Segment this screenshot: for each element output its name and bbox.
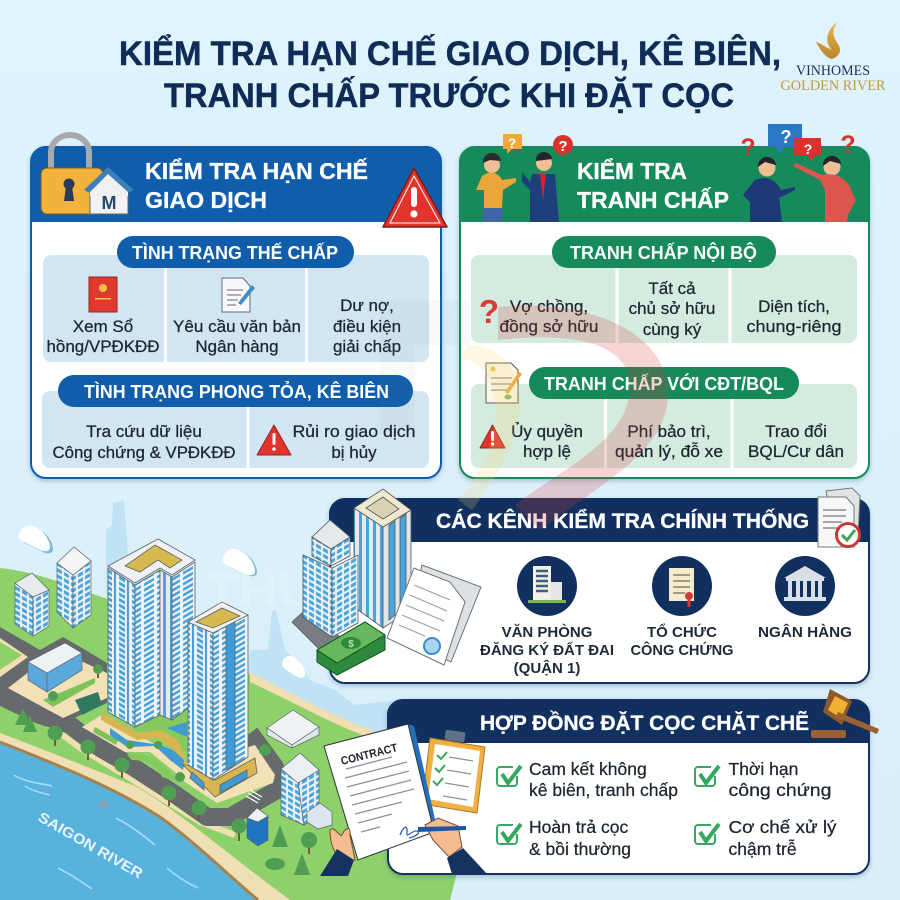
item: Ủy quyền: hợp lệ [523,442,571,461]
item: Yêu cầu văn bản: Ngân hàng [195,337,279,356]
channel: Tổ chức công chứng: TỔ CHỨC [647,623,717,641]
section pill: TÌNH TRẠNG THẾ CHẤP [132,242,338,263]
item: Ủy quyền: Ủy quyền [511,422,583,441]
illustration: money stack: $ [348,639,354,650]
section pill: TRANH CHẤP VỚI CĐT/BQL [544,373,784,394]
item: Trao đổi: Trao đổi [765,422,827,441]
item: Dư nợ: giải chấp [333,337,401,356]
item: Rủi ro giao dịch: bị hủy [331,443,377,462]
section pill [552,236,776,268]
checkitem: Hoàn trả cọc [497,817,631,859]
panel: Kiểm tra hạn chế giao dịch [31,135,447,478]
item: Trao đổi [748,422,844,461]
logo: Vinhomes Golden River [780,22,886,94]
item: Diện tích: chung-riêng [746,317,842,336]
item: Tất cả chủ sở hữu [629,279,715,339]
item: Tra cứu dữ liệu: Công chứng & VPĐKĐĐ [52,443,236,462]
panel heading: HỢP ĐỒNG ĐẶT CỌC CHẶT CHẼ [480,710,809,735]
illustration: clipboard checklist [422,730,485,813]
item: Rủi ro giao dịch: Rủi ro giao dịch [292,422,416,441]
channel: Văn phòng đăng ký đất đai: (QUẬN 1) [514,659,580,677]
watermark: faint brand text: THUẬN ĐỨC PHÁT [205,564,700,616]
item: Tất cả chủ sở hữu: chủ sở hữu [629,299,715,318]
title: KIỂM TRA HẠN CHẾ GIAO DỊCH, KÊ BIÊN, [119,35,781,73]
checkitem: Cam kết không: kê biên, tranh chấp [529,780,678,800]
section pill [529,367,799,399]
section: Tình trạng thế chấp [43,236,429,362]
icon: woman and man talking [476,134,573,222]
item: Dư nợ [333,296,401,356]
section pill [117,236,354,268]
icon: document and pen [222,278,255,312]
title [119,35,781,115]
illustration: office buildings [292,489,411,650]
roads [0,627,277,817]
tower podium [101,712,187,770]
checkitem: Cơ chế xử lý: chậm trễ [728,838,797,859]
checkitem: Thời hạn công chứng: Thời hạn [728,759,798,779]
item: Tra cứu dữ liệu [52,422,236,462]
channel: Văn phòng đăng ký đất đai: ĐĂNG KÝ ĐẤT ĐAI [480,641,614,659]
title: TRANH CHẤP TRƯỚC KHI ĐẶT CỌC [164,77,734,115]
item: Tất cả chủ sở hữu: Tất cả [648,279,696,298]
tower 1 [108,539,195,727]
item: Diện tích [746,297,842,336]
item: Trao đổi: BQL/Cư dân [748,442,844,461]
item: Diện tích: Diện tích, [758,297,830,316]
icon: two men arguing: ? [840,131,856,159]
item: Tất cả chủ sở hữu: cùng ký [643,320,702,339]
item: Xem Sổ hồng [46,317,160,356]
icon: gavel [811,689,879,738]
icon: verified documents [818,488,860,547]
panel: Hợp đồng đặt cọc chặt chẽ [320,689,879,876]
item: Rủi ro giao dịch [292,422,416,462]
item: Xem Sổ hồng: Xem Sổ [73,317,133,336]
trees [15,664,317,875]
river waves [14,775,198,889]
item: Vợ chồng [500,297,598,336]
item: Vợ chồng: Vợ chồng, [510,297,588,316]
small buildings [15,547,332,846]
illustration: signed contract and hands: CONTRACT [340,742,399,768]
panel heading: KIỂM TRA [577,157,687,184]
item: Dư nợ: Dư nợ, [340,296,394,315]
panel: Kiểm tra tranh chấp [459,124,869,478]
icon: small warning [257,425,291,455]
sand edge [250,672,395,746]
illustration: riverside city [0,539,470,900]
panel heading: KIỂM TRA HẠN CHẾ [145,157,368,184]
channel: Văn phòng đăng ký đất đai [480,556,614,677]
section pill [58,375,413,407]
panel heading: CÁC KÊNH KIỂM TRA CHÍNH THỐNG [436,507,809,533]
icon: red book [89,277,117,312]
item: Yêu cầu văn bản: Yêu cầu văn bản [173,317,301,336]
illustration: city skyline [106,500,400,760]
icon: two men arguing: ? [780,127,792,147]
section: Tranh chấp với CĐT/BQL [471,363,857,468]
icon: small warning [480,425,505,448]
panel heading [145,157,368,213]
watermark: red and yellow D logo [380,300,668,530]
checkitem: Thời hạn công chứng [695,759,832,800]
icon: two men arguing: ? [740,134,756,162]
section pill: TRANH CHẤP NỘI BỘ [570,242,757,263]
illustration: money stack [317,622,385,675]
panel: Các kênh kiểm tra chính thống [292,488,869,683]
sidewalk strip [0,703,235,835]
checkitem: Cơ chế xử lý: Cơ chế xử lý [728,817,837,837]
icon: warning triangle [383,168,447,227]
icon: woman and man talking: ? [558,138,568,155]
checkitem: Cam kết không: Cam kết không [529,759,647,779]
item: Phí bảo trì: Phí bảo trì, [627,422,711,441]
illustration: clouds [19,526,305,678]
channel: Tổ chức công chứng [630,556,734,659]
channel: Tổ chức công chứng: CÔNG CHỨNG [630,641,734,659]
checkitem: Hoàn trả cọc: Hoàn trả cọc [529,817,628,837]
channel: Văn phòng đăng ký đất đai: VĂN PHÒNG [502,623,592,641]
checkitem: Cơ chế xử lý [695,817,837,859]
tower 2 [183,602,257,797]
item: Tra cứu dữ liệu: Tra cứu dữ liệu [86,422,202,441]
channel: Ngân hàng: NGÂN HÀNG [758,623,852,641]
icon: house with M: M [102,193,116,213]
section: Tình trạng phong tỏa [42,375,429,468]
icon: question mark: ? [479,293,499,330]
icon: two men arguing [740,124,856,222]
section pill: TÌNH TRẠNG PHONG TỎA, KÊ BIÊN [84,381,389,402]
icon: two men arguing: ? [804,141,812,157]
river bank and water [0,733,290,900]
section: Tranh chấp nội bộ [471,236,857,343]
illustration: stamped document [387,565,481,665]
icon: signed document [486,363,522,403]
item: Phí bảo trì: quản lý, đỗ xe [615,442,723,461]
panel heading [577,157,729,213]
logo: Vinhomes Golden River: VINHOMES [796,63,870,79]
icon: woman and man talking: ? [508,135,516,151]
item: Xem Sổ hồng: hồng/VPĐKĐĐ [46,337,160,356]
checkitem: Cam kết không [497,759,678,800]
plaza [8,650,107,718]
panel heading: GIAO DỊCH [145,187,267,213]
checkitem: Hoàn trả cọc: & bồi thường [529,839,631,859]
logo: Vinhomes Golden River: GOLDEN RIVER [780,78,886,94]
item: Ủy quyền [511,422,583,461]
panel heading: TRANH CHẤP [577,186,729,213]
crosswalk [246,790,262,803]
illustration: signed contract and hands [320,724,487,876]
checkitem: Thời hạn công chứng: công chứng [728,780,832,800]
item: Yêu cầu văn bản [173,317,301,356]
item: Dư nợ: điều kiện [333,317,401,336]
channel: Ngân hàng [758,556,852,641]
item: Phí bảo trì [615,422,723,461]
land [0,568,470,900]
river label: SAIGON RIVER [35,810,146,883]
icon: padlock [41,135,103,214]
icon: house with M [84,167,134,214]
item: Vợ chồng: đồng sở hữu [500,317,598,336]
